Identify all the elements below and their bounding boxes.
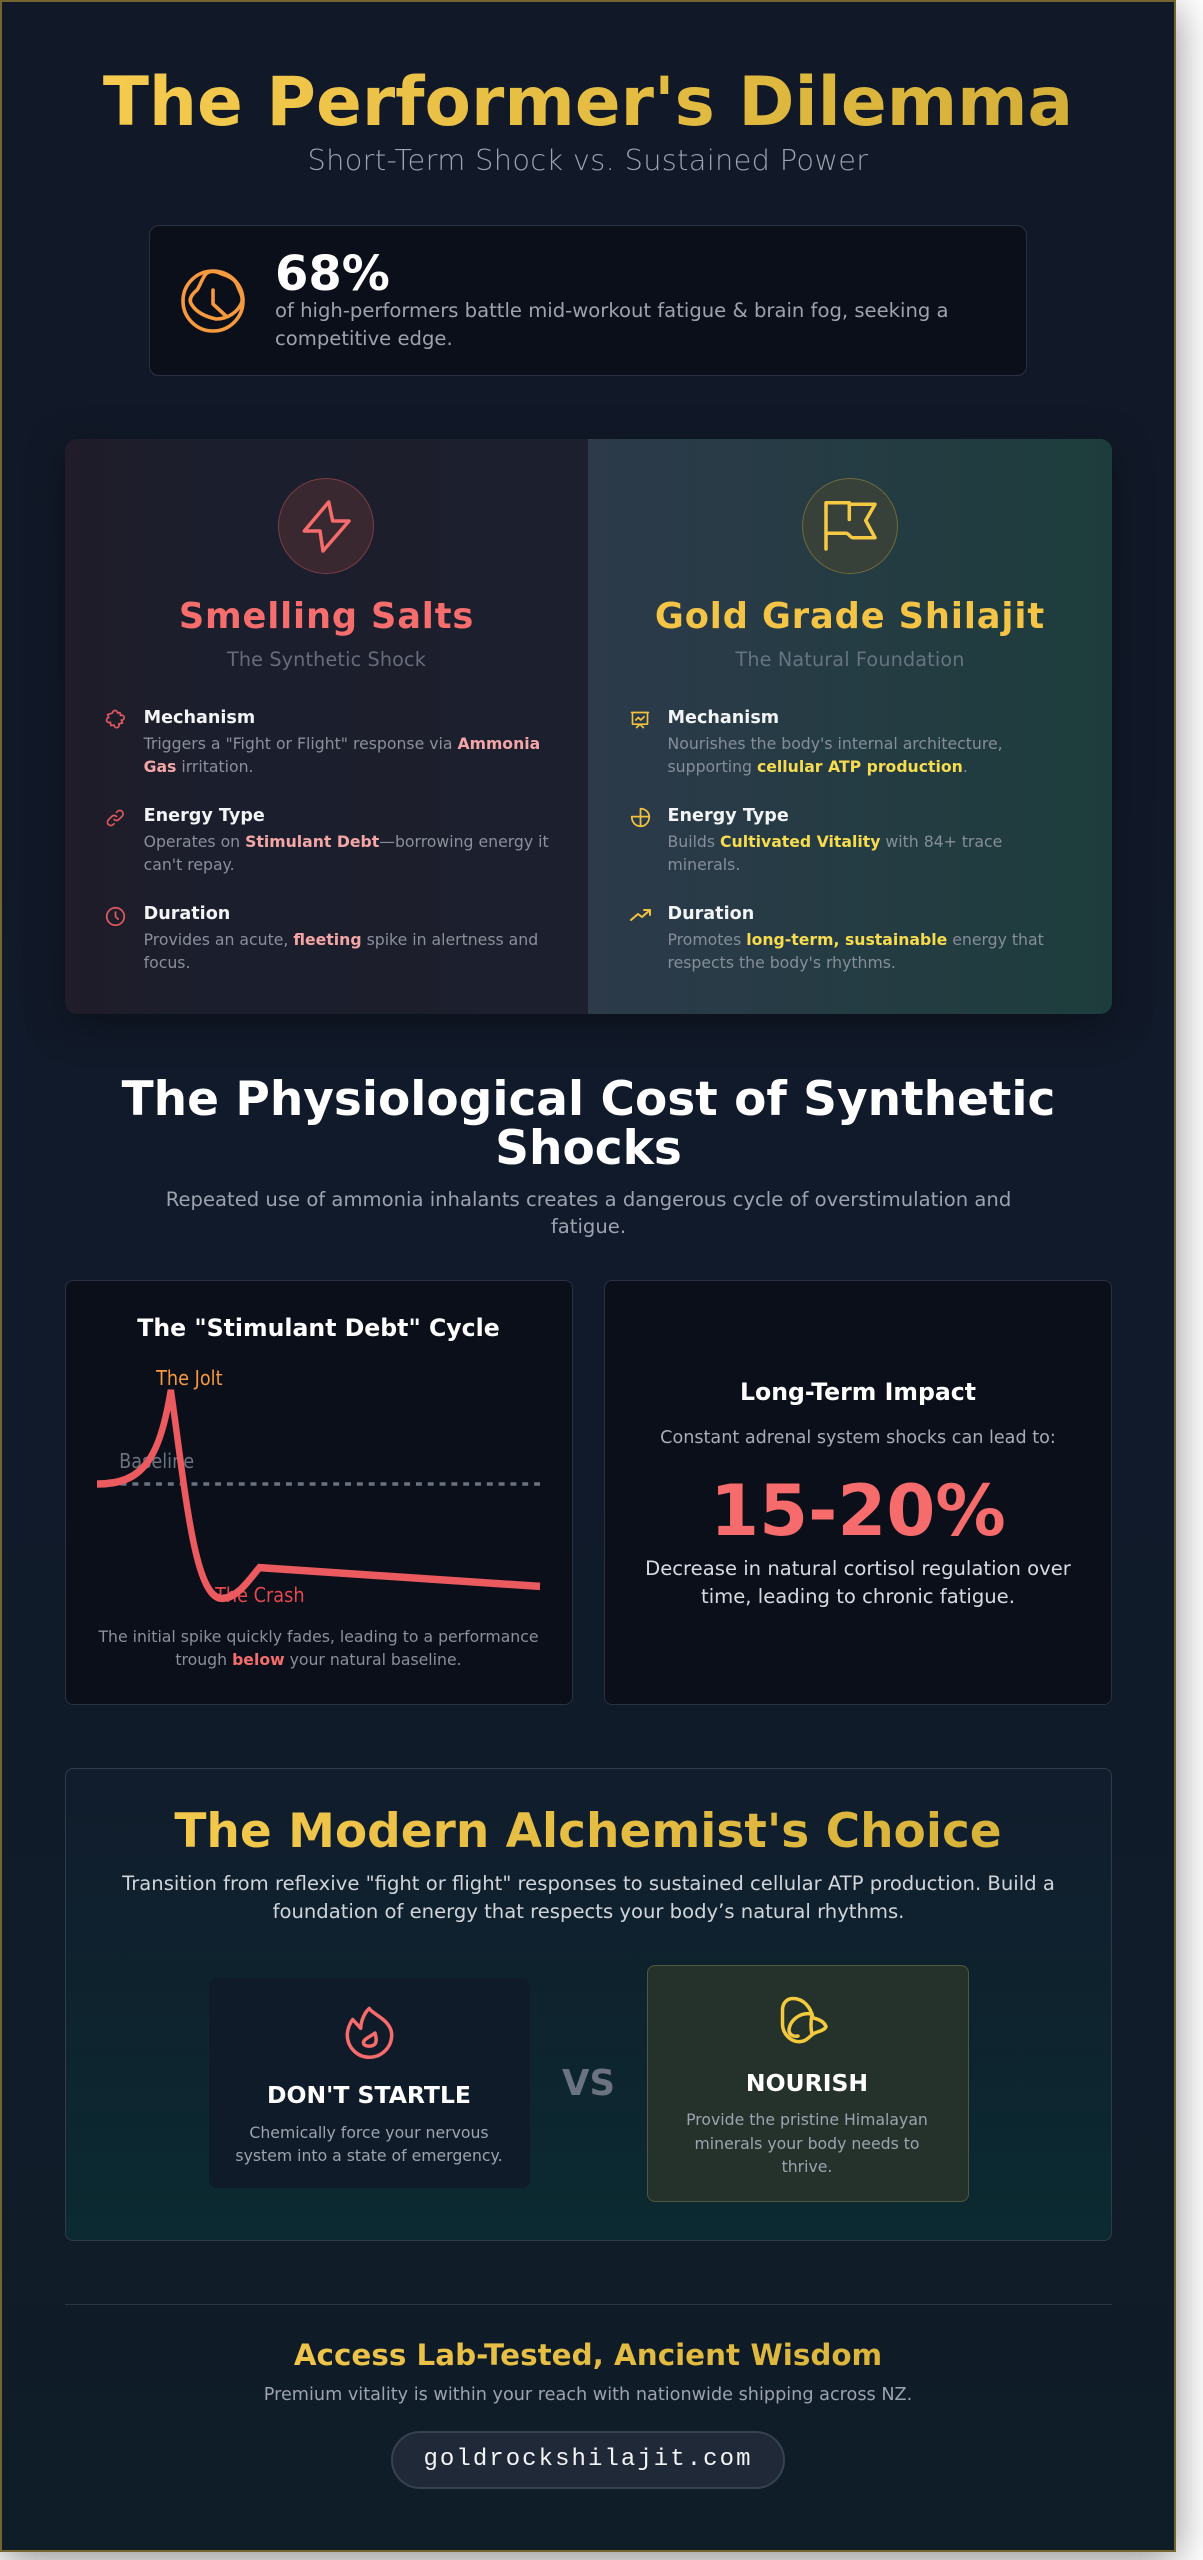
item: mechanism: Mechanism [668,708,779,728]
item: mechanism: Triggers a "Fight or Flight" response via Ammonia [144,734,540,753]
alchemist description: foundation of energy that respects your body’s natural rhythms. [273,1900,904,1923]
stat description: of high-performers battle mid-workout fatigue & brain fog, seeking a [275,299,949,322]
item: duration: Duration [668,904,754,924]
section description [166,1188,1011,1238]
stat number: 68% [275,246,390,302]
footer heading: Access Lab-Tested, Ancient Wisdom [294,2338,882,2372]
icon: presentation chart [630,712,650,728]
subheading: natural foundation: The Natural Foundation [735,648,965,671]
icon: flame [346,2006,394,2059]
icon: nourish [780,1996,828,2044]
impact intro: Constant adrenal system shocks can lead to: [660,1428,1056,1448]
panel: modern alchemist [65,1768,1112,2241]
icon: puzzle [106,710,125,728]
url pill [391,2431,785,2489]
stat description: competitive edge. [275,326,453,350]
alchemist description: Transition from reflexive "fight or flight" responses to sustained cellular ATP production. Build a [122,1872,1055,1895]
panel: comparison [65,439,1112,1014]
section description: fatigue. [551,1215,626,1238]
heading: physiological cost: The Physiological Cost of Synthetic [122,1072,1055,1127]
impact description: Decrease in natural cortisol regulation over [645,1557,1071,1580]
impact description [645,1557,1071,1608]
heading: modern alchemist's choice: The Modern Alchemist's Choice [174,1804,1002,1859]
item: duration: focus. [144,953,190,972]
icon: trend arrow [630,909,651,921]
icon: lightning bolt [278,478,374,574]
card text: nourish: minerals your body needs to [694,2134,919,2152]
item: energy type [144,806,549,874]
panel: stat callout [149,225,1027,376]
item: energy type [668,806,1002,874]
card text: nourish: thrive. [782,2157,832,2176]
icon: clock [106,906,126,926]
item: duration: Provides an acute, fleeting spike in alertness and [144,930,538,949]
chart caption: trough below your natural baseline. [175,1650,462,1669]
heading: gold grade shilajit: Gold Grade Shilajit [655,596,1045,637]
icon: brain [181,269,245,333]
item: duration: Duration [144,904,230,924]
item: mechanism: supporting cellular ATP production. [668,757,968,776]
heading: smelling salts: Smelling Salts [179,596,474,637]
item: energy type: Energy Type [668,806,789,826]
section description: Repeated use of ammonia inhalants creates a dangerous cycle of overstimulation and [166,1188,1011,1211]
card text: nourish [686,2110,928,2176]
heading: physiological cost: Shocks [495,1120,682,1176]
item: duration [144,904,538,972]
panel: long-term impact [604,1280,1112,1705]
chart caption: The initial spike quickly fades, leading to a performance [98,1627,539,1646]
card: nourish [646,1965,968,2202]
item: duration [668,904,1044,972]
line chart: stimulant debt [97,1366,540,1607]
impact title: Long-Term Impact [740,1378,976,1406]
impact description: time, leading to chronic fatigue. [701,1584,1015,1608]
line chart: stimulant debt: The Crash [214,1583,305,1607]
footer text: Premium vitality is within your reach with nationwide shipping across NZ. [264,2385,912,2405]
icon: pie chart [630,808,650,828]
chart title: The "Stimulant Debt" Cycle [137,1314,500,1342]
item: mechanism: Nourishes the body's internal architecture, [668,734,1003,753]
card text: don't startle [235,2123,503,2165]
card text: nourish: Provide the pristine Himalayan [686,2110,928,2129]
item: energy type: Builds Cultivated Vitality with 84+ trace [668,832,1002,851]
item: energy type: can't repay. [144,855,235,874]
card title: nourish: NOURISH [746,2069,868,2097]
footer heading [88,2338,1088,2372]
item: duration: Promotes long-term, sustainable energy that [668,930,1044,949]
title: The Performer's Dilemma [103,62,1073,141]
card text: don't startle: Chemically force your nervous [249,2123,489,2142]
item: mechanism [144,708,540,776]
item: energy type: Operates on Stimulant Debt—borrowing energy it [144,832,549,851]
stat description [275,299,949,350]
item: mechanism: Mechanism [144,708,255,728]
icon: flag [802,478,898,574]
card text: don't startle: system into a state of emergency. [235,2146,503,2165]
url pill: goldrockshilajit.com [423,2446,753,2473]
line chart: stimulant debt: The Jolt [155,1366,223,1390]
panel: stimulant debt cycle [65,1280,572,1705]
card: don't startle [209,1978,530,2188]
item: energy type: Energy Type [144,806,265,826]
item: mechanism: Gas irritation. [144,757,254,776]
impact number: 15-20% [710,1470,1006,1552]
icon: link [106,810,124,826]
chart caption [98,1627,539,1669]
item: duration: respects the body's rhythms. [668,953,896,972]
item: energy type: minerals. [668,855,740,874]
item: mechanism [668,708,1003,776]
alchemist description [122,1872,1055,1923]
card title: don't startle: DON'T STARTLE [267,2081,471,2109]
vs label: VS [562,2063,615,2104]
subtitle: Short-Term Shock vs. Sustained Power [308,143,868,177]
subheading: synthetic shock: The Synthetic Shock [227,648,426,671]
heading: physiological cost [122,1072,1055,1176]
line chart: stimulant debt: Baseline [119,1449,194,1473]
